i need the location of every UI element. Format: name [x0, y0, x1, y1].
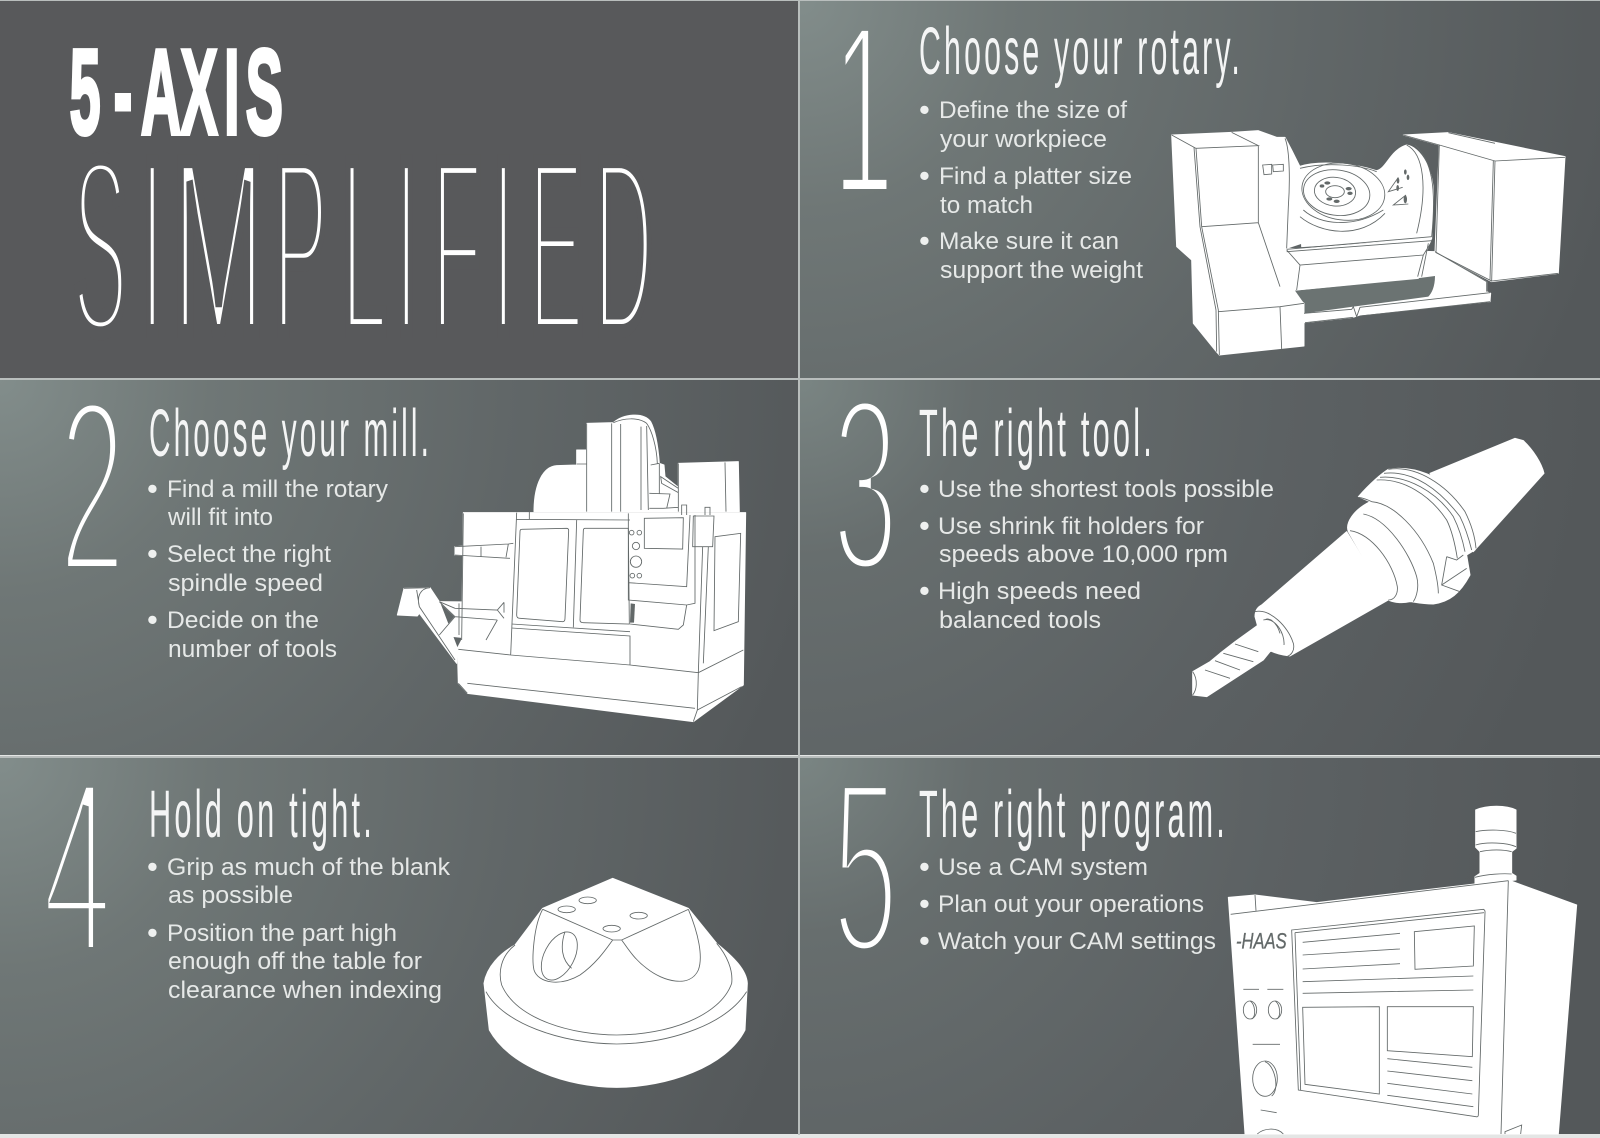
bullet list: Position the part high — [167, 920, 397, 947]
panel: step 3 the right tool — [800, 348, 1600, 755]
icon: tool holder — [1193, 438, 1544, 697]
bullet list: Find a mill the rotary — [167, 476, 388, 503]
title: SIMPLIFIED: M — [171, 108, 266, 383]
bullet list — [919, 471, 1274, 634]
bullet list: Make sure it can — [939, 228, 1119, 255]
bullet list: Decide on the — [167, 607, 319, 634]
bullet list: Define the size of — [939, 97, 1127, 124]
numeral 5: 5 — [832, 730, 898, 1006]
bullet list: enough off the table for — [168, 948, 422, 975]
bullet list: Select the right — [167, 541, 331, 568]
panel: step 2 choose your mill — [0, 350, 798, 755]
bullet list: Grip as much of the blank — [167, 854, 451, 881]
bullet list: • — [919, 223, 930, 258]
bullet list: • — [919, 849, 930, 884]
numeral 3: 3 — [832, 348, 898, 624]
panel: step 4 hold on tight — [0, 728, 798, 1134]
bullet list — [147, 849, 451, 1004]
bullet list: • — [919, 471, 930, 506]
bullet list: Use the shortest tools possible — [938, 476, 1274, 503]
title: SIMPLIFIED: F — [432, 108, 482, 383]
bullet list — [919, 92, 1143, 284]
bullet list: • — [919, 923, 930, 958]
title: SIMPLIFIED: I — [492, 108, 515, 383]
panel: step 3 the right tool: The right tool. — [919, 396, 1155, 471]
title: SIMPLIFIED: P — [273, 108, 328, 383]
title: 5-AXIS: 5-AXIS — [69, 25, 283, 161]
bullet list: • — [147, 915, 158, 950]
bullet list: will fit into — [167, 504, 273, 531]
bullet list: Watch your CAM settings — [938, 928, 1216, 955]
bullet list: • — [919, 158, 930, 193]
bullet list: Use a CAM system — [938, 854, 1148, 881]
bullet list — [147, 471, 388, 663]
panel: step 5 the right program: The right program. — [919, 777, 1228, 852]
title: SIMPLIFIED: L — [342, 108, 387, 383]
panel: title — [0, 1, 798, 383]
bullet list: • — [147, 536, 158, 571]
bullet list: • — [919, 92, 930, 127]
bullet list: speeds above 10,000 rpm — [939, 541, 1228, 568]
icon: control pendant — [1228, 806, 1577, 1134]
panel: step 5 the right program — [800, 730, 1600, 1134]
bullet list: number of tools — [168, 636, 337, 663]
bullet list: Find a platter size — [939, 163, 1132, 190]
bullet list: High speeds need — [938, 578, 1141, 605]
bullet list: balanced tools — [939, 607, 1101, 634]
panel: step 1 choose your rotary — [800, 0, 1600, 378]
icon: rotary table — [1172, 131, 1565, 355]
bullet list: • — [147, 471, 158, 506]
bullet list: • — [147, 602, 158, 637]
title: SIMPLIFIED: D — [594, 108, 653, 383]
title: SIMPLIFIED: E — [529, 108, 583, 383]
title: SIMPLIFIED — [73, 108, 653, 383]
bullet list: your workpiece — [940, 126, 1107, 153]
bullet list: Use shrink fit holders for — [938, 513, 1204, 540]
title: SIMPLIFIED: I — [395, 108, 418, 383]
title: SIMPLIFIED: I — [141, 108, 164, 383]
icon: machined part on fixture — [484, 878, 747, 1087]
panel: step 4 hold on tight: Hold on tight. — [149, 777, 375, 852]
numeral 2: 2 — [59, 350, 125, 626]
bullet list: • — [919, 508, 930, 543]
bullet list: Plan out your operations — [938, 891, 1204, 918]
bullet list: clearance when indexing — [168, 977, 442, 1004]
bullet list: as possible — [168, 882, 293, 909]
title: SIMPLIFIED: S — [73, 108, 127, 383]
bullet list: to match — [940, 192, 1033, 219]
panel: step 2 choose your mill: Choose your mill. — [149, 396, 432, 471]
bullet list: • — [919, 573, 930, 608]
bullet list: support the weight — [940, 257, 1143, 284]
bullet list: • — [147, 849, 158, 884]
logo: HAAS: -HAAS — [1236, 929, 1287, 954]
icon: vertical mill — [397, 415, 746, 722]
numeral 4: 4 — [42, 728, 112, 1006]
bullet list — [919, 849, 1216, 958]
bullet list: • — [919, 886, 930, 921]
bullet list: spindle speed — [168, 570, 323, 597]
